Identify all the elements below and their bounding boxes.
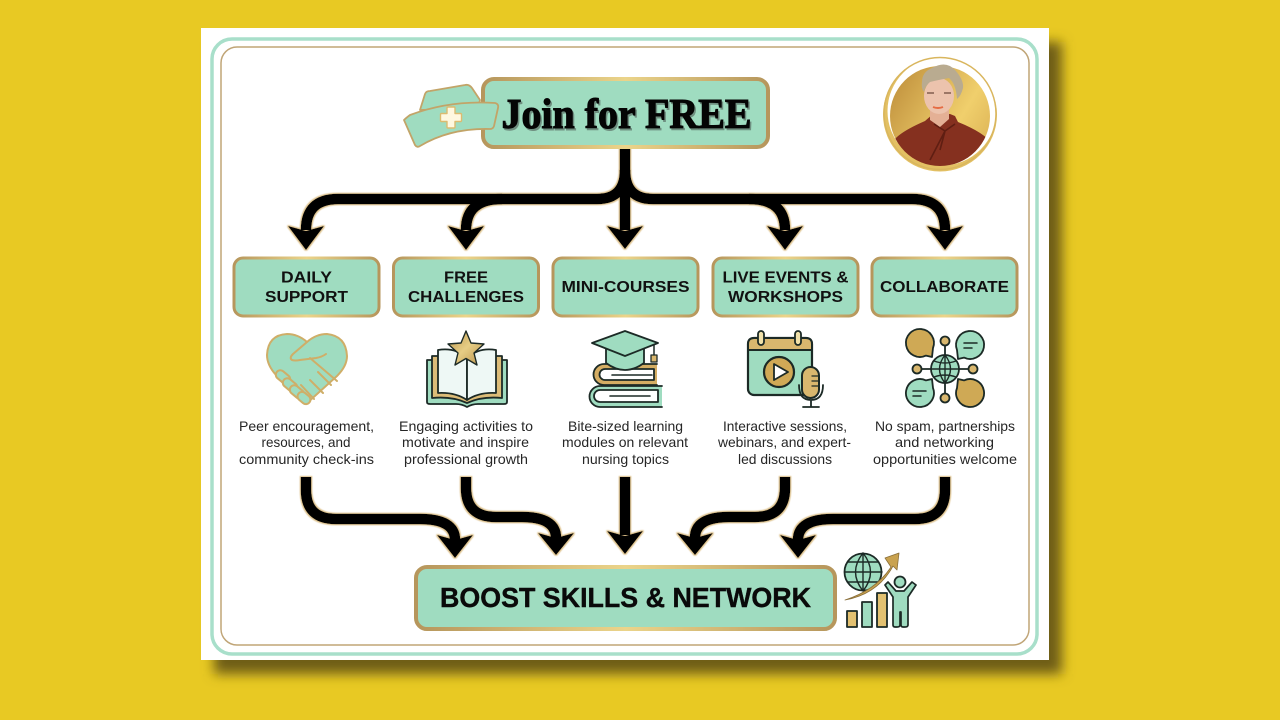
icon: heart handshake <box>267 334 347 406</box>
portrait <box>883 56 997 172</box>
title box <box>483 79 768 147</box>
card shadow <box>214 42 1062 674</box>
description: collaborate: and networking <box>895 434 994 450</box>
description: daily support: Peer encouragement, <box>239 418 374 434</box>
top branching arrows <box>288 149 963 250</box>
description: free challenges <box>399 418 533 467</box>
description: mini-courses: nursing topics <box>582 451 669 467</box>
icon: book with star <box>427 331 507 407</box>
title box: Join for FREE <box>503 94 753 140</box>
box: mini-courses: MINI-COURSES <box>562 279 690 296</box>
icon: graduation cap and books <box>590 331 662 407</box>
description: collaborate: No spam, partnerships <box>875 418 1015 434</box>
description: free challenges: motivate and inspire <box>402 434 529 450</box>
icon: growth and global network <box>844 553 916 627</box>
description: live events: webinars, and expert- <box>717 434 851 450</box>
panel: white card <box>201 28 1049 660</box>
description: daily support: community check-ins <box>239 451 374 467</box>
box: mini-courses <box>553 258 698 316</box>
box: daily support <box>234 258 379 316</box>
box: collaborate <box>872 258 1017 316</box>
box: free challenges: FREE <box>444 270 488 286</box>
description: daily support: resources, and <box>262 434 350 450</box>
box: daily support: DAILY <box>281 270 332 286</box>
outcome box <box>416 567 835 629</box>
box: collaborate: COLLABORATE <box>880 279 1009 296</box>
box: free challenges: CHALLENGES <box>408 289 524 306</box>
description: free challenges: Engaging activities to <box>399 418 533 434</box>
icon: nurse cap <box>404 85 498 147</box>
icon: collaboration network <box>906 329 984 407</box>
description: live events: led discussions <box>738 451 832 467</box>
description: mini-courses <box>562 418 688 467</box>
bottom converging arrows <box>306 477 945 558</box>
box: live events and workshops <box>713 258 858 316</box>
description: live events <box>717 418 851 467</box>
description: live events: Interactive sessions, <box>723 418 847 434</box>
box: live events and workshops: WORKSHOPS <box>728 289 843 306</box>
description: mini-courses: Bite-sized learning <box>568 418 683 434</box>
box: daily support: SUPPORT <box>265 289 348 306</box>
title box: Join for FREE <box>502 92 752 138</box>
description: collaborate <box>873 418 1017 467</box>
description: free challenges: professional growth <box>404 451 528 467</box>
box: live events and workshops: LIVE EVENTS & <box>722 270 849 286</box>
outcome box: BOOST SKILLS & NETWORK <box>440 582 811 613</box>
icon: calendar with play and microphone <box>748 331 823 407</box>
description: collaborate: opportunities welcome <box>873 451 1017 467</box>
box: free challenges <box>394 258 538 316</box>
description: daily support <box>239 418 374 467</box>
description: mini-courses: modules on relevant <box>562 434 688 450</box>
